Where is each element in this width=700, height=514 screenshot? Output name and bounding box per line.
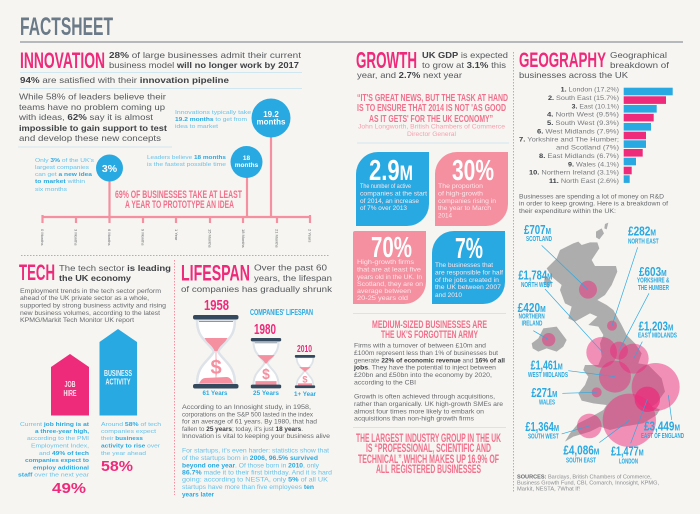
text block: innovation intro bbox=[18, 50, 302, 147]
text block: innovation intro: teams have no problem coming up bbox=[19, 102, 165, 112]
callout: quote: John Longworth, British Chambers of Commerce bbox=[358, 124, 506, 130]
text: 3% note: can get a new idea bbox=[35, 172, 93, 178]
stat card: 2.9M: of 7% over 2013 bbox=[360, 206, 408, 212]
text: geography intro bbox=[519, 50, 670, 80]
chart: job hire arrow bbox=[51, 354, 89, 416]
timeline chart: 6 Months bbox=[107, 229, 112, 245]
chart: region labels: 7. Yorkshire and The Humber; bbox=[519, 137, 619, 144]
map labels: NORTH EAST bbox=[628, 238, 659, 245]
heading: tech: TECH bbox=[19, 260, 55, 285]
stat card: 7%: of the jobs created in bbox=[435, 278, 499, 284]
text: lifespan paragraph: corporations on the S&P 500 lasted in the index bbox=[182, 412, 313, 418]
text: growth intro: to grow at 3.1% this bbox=[422, 60, 506, 70]
callout: prototype headline bbox=[115, 189, 242, 211]
text: forgotten army paragraph: jobs . They have the potential to inject between bbox=[353, 366, 496, 372]
text: tech intro: the UK economy bbox=[59, 274, 132, 283]
text: growth intro: year, and 2.7% next year bbox=[357, 70, 462, 80]
text: geography intro: breakdown of bbox=[610, 60, 670, 70]
callout: prototype headline: A YEAR TO PROTOTYPE AN IDEA bbox=[125, 199, 234, 211]
icon: hourglass 1980: $ bbox=[262, 366, 270, 382]
map labels: £282M bbox=[628, 223, 656, 238]
chart: companies' lifespan hourglasses: 1958 bbox=[204, 297, 229, 314]
map outline bbox=[532, 223, 665, 442]
timeline chart: 21 Months bbox=[274, 229, 280, 248]
text: job hire note: a three-year high, bbox=[35, 429, 89, 435]
icon: hourglass 1958: $ bbox=[210, 357, 222, 379]
map labels: NORTH WEST bbox=[521, 282, 553, 289]
stat card: 30%: companies rising in bbox=[438, 199, 496, 205]
stat card: 7%: and 2010 bbox=[435, 293, 463, 299]
callout: quote bbox=[357, 92, 508, 138]
chart: companies' lifespan hourglasses bbox=[193, 297, 317, 398]
stat card: 30%: The proportion bbox=[438, 184, 483, 190]
text: lifespan intro bbox=[181, 263, 333, 294]
text: forgotten army paragraph: acquisitions than non-high growth firms bbox=[354, 416, 474, 422]
heading: forgotten army: THE UK'S FORGOTTEN ARMY bbox=[381, 329, 478, 341]
chart: region bars bbox=[624, 88, 673, 183]
chart: companies' lifespan hourglasses: 25 Years bbox=[253, 391, 280, 397]
text: forgotten army paragraph: Growth is often achieved through acquisitions, bbox=[354, 395, 495, 401]
text block: innovation intro: with ideas, 62% say it is almost bbox=[18, 112, 154, 122]
callout: prototype headline: 69% OF BUSINESSES TAKE AT LEAST bbox=[115, 189, 242, 201]
text: lifespan paragraph: fallen to 25 years ; today, it's just 18 years . bbox=[182, 427, 303, 433]
text: business activity note: the year ahead bbox=[101, 451, 146, 457]
text: job hire note: according to the PMI bbox=[27, 436, 89, 442]
text: tech paragraph: new business volumes, according to the latest bbox=[20, 311, 160, 317]
text: 18 months note bbox=[147, 155, 226, 168]
text: forgotten army paragraph bbox=[353, 344, 505, 422]
text: startups paragraph: startups have more than five employees ten bbox=[182, 485, 314, 491]
timeline chart: 0 Months bbox=[40, 229, 45, 245]
map labels: £3,449M bbox=[644, 419, 680, 434]
stat card: 2.9M: 2.9M bbox=[369, 155, 413, 187]
text: 19.2 months note: 19.2 months to get from bbox=[175, 117, 247, 123]
stat card: 70% bbox=[353, 231, 426, 304]
chart: region labels: 4. North West (9.5%) bbox=[547, 112, 619, 119]
text: tech paragraph: ahead of the UK private sector as a whole, bbox=[20, 296, 149, 302]
stat card: 7%: are responsible for half bbox=[435, 270, 503, 276]
text: 3% note: Only 3% of the UK's bbox=[35, 158, 94, 164]
stat card: 30%: 30% bbox=[452, 155, 494, 187]
text: forgotten army paragraph: almost four times more likely to embark on bbox=[354, 409, 484, 415]
text: lifespan paragraph: According to an Innosight study, in 1958, bbox=[182, 405, 311, 411]
stat card: 30% bbox=[435, 152, 508, 226]
text: tech paragraph: Employment trends in the tech sector perform bbox=[20, 289, 161, 295]
map labels bbox=[518, 222, 684, 466]
text: 18 months note: Leaders believe 18 months bbox=[147, 155, 226, 161]
text: R&D paragraph: their expenditure within the UK: bbox=[519, 209, 616, 215]
callout: 18 months circle: 18 bbox=[243, 155, 250, 162]
stat card: 70%: Scotland, they are on bbox=[357, 282, 423, 288]
map labels: £1,477M bbox=[611, 443, 644, 458]
chart: region labels: 8. East Midlands (6.7%) bbox=[539, 153, 619, 160]
map labels: SCOTLAND bbox=[526, 236, 552, 243]
text: startups paragraph: 86.7% made it to their first birthday. And it is hard bbox=[182, 470, 332, 476]
callout: largest industry group: IS “PROFESSIONAL, SCIENTIFIC AND bbox=[366, 441, 491, 455]
text: geography intro: Geographical bbox=[610, 50, 667, 60]
stat card: 2.9M: companies at the start bbox=[360, 192, 427, 198]
heading: innovation: INNOVATION bbox=[20, 48, 105, 73]
text: lifespan intro: of companies has gradually shrunk bbox=[181, 284, 333, 294]
stat card: 70%: High-growth firms bbox=[357, 260, 414, 266]
text: business activity note: their business bbox=[101, 436, 144, 442]
chart: region labels: 3. East (10.1%) bbox=[572, 103, 619, 110]
panel: innovation bbox=[18, 48, 313, 248]
text block: innovation intro: 28% of large businesses admit their current bbox=[109, 50, 302, 60]
stat card: 7%: 7% bbox=[455, 233, 483, 265]
map bubbles bbox=[542, 281, 680, 447]
text block: innovation intro: impossible to gain support to test bbox=[19, 123, 167, 133]
text: startups paragraph: years later bbox=[182, 492, 215, 498]
callout: quote: IS TO ENSURE THAT 2014 IS NOT 'AS GOOD bbox=[357, 102, 506, 114]
callout: largest industry group: ALL REGISTERED BUSINESSES bbox=[376, 462, 481, 476]
text: R&D paragraph: in order to keep growing. Here is a breakdown of bbox=[519, 202, 668, 208]
chart: companies' lifespan hourglasses: 61 Years bbox=[202, 391, 228, 397]
chart: region labels: and Scotland (7%) bbox=[556, 145, 619, 152]
text: job hire note: employ additional bbox=[33, 466, 89, 472]
map labels: SOUTH EAST bbox=[566, 458, 596, 465]
text block: innovation intro: 94% are satisfied with their innovation pipeline bbox=[20, 75, 229, 85]
text: forgotten army paragraph: Firms with a turnover of between £10m and bbox=[354, 344, 486, 350]
text: sources: Business Growth Fund, CBI, Comarch, Innosight, KPMG, bbox=[517, 481, 659, 487]
callout: 19.2 months circle: 19.2 bbox=[263, 110, 279, 119]
callout: quote: “IT'S GREAT NEWS, BUT THE TASK AT HAND bbox=[357, 92, 508, 104]
timeline chart bbox=[35, 98, 312, 248]
text: startups paragraph: of the startups born in 2006, 96.5% survived bbox=[182, 456, 318, 462]
text: job hire note bbox=[18, 422, 89, 478]
text: business activity note: activity to rise over bbox=[101, 444, 160, 450]
text: 3% note: largest companies bbox=[35, 165, 89, 171]
icon: hourglass 2010: $ bbox=[302, 374, 308, 384]
callout: largest industry group: THE LARGEST INDUSTRY GROUP IN THE UK bbox=[356, 431, 501, 445]
text: 18 months note: is the fastest possible time bbox=[147, 162, 226, 168]
map labels: £4,086M bbox=[563, 442, 599, 457]
callout: quote: AS IT GETS' FOR THE UK ECONOMY” bbox=[369, 113, 493, 125]
heading: geography: GEOGRAPHY bbox=[519, 49, 606, 72]
text: forgotten army paragraph: generate 22% of economic revenue and 16% of all bbox=[354, 358, 505, 364]
text: business activity note: companies expect bbox=[101, 429, 156, 435]
map: UK regional R&D spend bbox=[518, 222, 684, 466]
stat card: 30%: of high-growth bbox=[438, 192, 483, 198]
text: job hire note: staff over the next year bbox=[18, 472, 89, 478]
map labels: £603M bbox=[639, 264, 667, 279]
map labels: IRELAND bbox=[522, 321, 542, 328]
stat card: 2.9M: of 2014, an increase bbox=[360, 199, 420, 205]
timeline chart: 15 Months bbox=[208, 229, 212, 248]
map labels: THE HUMBER bbox=[638, 285, 669, 292]
map labels: £1,461M bbox=[531, 358, 563, 373]
chart: region labels: 2. South East (15.7%) bbox=[548, 95, 619, 102]
text: growth intro bbox=[357, 50, 508, 80]
text: 3% note: six months bbox=[35, 187, 67, 193]
chart: region labels: 6. West Midlands (7.9%) bbox=[537, 128, 619, 135]
text: tech paragraph: KPMG/Markit Tech Monitor UK report bbox=[20, 318, 134, 324]
stat card: 70%: 20-25 years old bbox=[357, 296, 408, 302]
text: forgotten army paragraph: rather than organically. UK high-growth SMEs are bbox=[354, 402, 504, 408]
text: sources bbox=[517, 475, 659, 493]
map labels: NORTHERN bbox=[519, 314, 545, 321]
text block: innovation intro: business model will no longer work by 2017 bbox=[109, 60, 299, 70]
text: job hire note: Employment Index, bbox=[31, 444, 89, 450]
text: forgotten army paragraph: £100m represent less than 1% of businesses but bbox=[354, 351, 498, 357]
timeline chart: 18 Months bbox=[241, 229, 246, 248]
stat card: 70%: average between bbox=[357, 289, 411, 295]
text: job hire note: Current job hiring is at bbox=[20, 422, 89, 428]
map labels: WALES bbox=[539, 399, 555, 406]
text: lifespan paragraph: for an average of 61 years. By 1980, that had bbox=[182, 420, 317, 426]
chart: companies' lifespan hourglasses: 1+ Year bbox=[294, 392, 317, 398]
text: startups paragraph: beyond one year . Of those born in 2010 , only bbox=[182, 463, 319, 469]
text: tech intro: The tech sector is leading bbox=[59, 264, 171, 273]
timeline chart: 3 Months bbox=[74, 229, 78, 245]
text: growth intro: UK GDP is expected bbox=[422, 50, 508, 60]
panel: lifespan bbox=[181, 261, 333, 498]
callout: 3% circle: 3% bbox=[102, 163, 118, 175]
stat card: 30%: 2014 bbox=[438, 214, 453, 220]
heading: forgotten army bbox=[372, 319, 487, 341]
text: lifespan paragraph bbox=[182, 405, 331, 440]
text: 3% note bbox=[35, 158, 94, 193]
text: forgotten army paragraph: according to the CBI bbox=[354, 380, 416, 386]
stat card: 2.9M: The number of active bbox=[360, 184, 412, 190]
text: tech paragraph: supported by strong business activity and rising bbox=[20, 304, 166, 310]
chart: business activity arrow: BUSINESS bbox=[104, 369, 132, 378]
chart: region labels: 9. Wales (4.1%) bbox=[568, 161, 619, 168]
text: lifespan intro: Over the past 60 bbox=[254, 263, 327, 273]
stat: 58%: 58% bbox=[101, 458, 133, 475]
map labels: EAST MIDLANDS bbox=[638, 333, 677, 340]
stat card: 7% bbox=[432, 231, 505, 304]
text: job hire note: companies expect to bbox=[25, 458, 89, 464]
text block: innovation intro: While 58% of leaders believe their bbox=[19, 92, 166, 102]
text: tech intro bbox=[59, 264, 171, 283]
callout: quote: Director General bbox=[407, 132, 456, 138]
map labels: £1,364M bbox=[525, 419, 559, 434]
text: startups paragraph: going: according to NESTA, only 5% of all UK bbox=[182, 478, 328, 484]
text: 3% note: to market within bbox=[35, 179, 85, 185]
callout: largest industry group bbox=[356, 431, 501, 476]
chart: business activity arrow bbox=[100, 329, 137, 416]
heading: forgotten army: MEDIUM-SIZED BUSINESSES ARE bbox=[372, 319, 487, 331]
map labels: £1,784M bbox=[518, 267, 552, 282]
chart: companies' lifespan hourglasses: 1980 bbox=[254, 321, 276, 338]
chart: region labels: 11. North East (2.6%) bbox=[549, 178, 619, 185]
heading: growth: GROWTH bbox=[356, 47, 417, 73]
text: job hire note: and 49% of tech bbox=[39, 451, 89, 457]
text: forgotten army paragraph: £20bn and £50bn into the economy by 2020, bbox=[354, 373, 492, 379]
text: startups paragraph bbox=[182, 449, 332, 498]
callout: 18 months circle bbox=[230, 146, 262, 178]
stat: 49%: 49% bbox=[52, 480, 86, 497]
map labels: £1,203M bbox=[639, 318, 673, 333]
timeline chart: 1 Year bbox=[174, 229, 179, 241]
text: R&D paragraph bbox=[519, 194, 668, 215]
callout: 19.2 months circle: months bbox=[257, 118, 286, 126]
chart: region labels: 10. Northern Ireland (3.1%) bbox=[529, 170, 619, 177]
chart: business activity arrow: ACTIVITY bbox=[106, 378, 131, 386]
text: 19.2 months note: Innovations typically take bbox=[175, 110, 251, 116]
text: sources: Markit, NESTA, 7What If! bbox=[517, 487, 580, 493]
map labels: £420M bbox=[518, 300, 546, 315]
text block: innovation intro: and develop these new concepts bbox=[19, 133, 161, 143]
stat card: 70%: years old in the UK. In bbox=[357, 275, 422, 281]
heading: lifespan: LIFESPAN bbox=[181, 261, 250, 286]
stat card: 30%: the year to March bbox=[438, 206, 491, 212]
callout: 18 months circle: months bbox=[235, 162, 259, 169]
chart: job hire arrow: JOB bbox=[64, 380, 76, 389]
chart: region labels: 1. London (17.2%) bbox=[561, 87, 619, 94]
text: 19.2 months note: idea to market bbox=[175, 124, 219, 130]
map labels: SOUTH WEST bbox=[528, 433, 559, 440]
callout: 3% circle bbox=[96, 154, 123, 182]
chart: companies' lifespan hourglasses: COMPANIES' LIFESPAN bbox=[250, 307, 313, 317]
text: business activity note bbox=[101, 422, 161, 457]
text: lifespan intro: years, the lifespan bbox=[254, 273, 332, 283]
map labels: £707M bbox=[524, 222, 551, 237]
panel: geography bbox=[517, 49, 684, 493]
text: business activity note: Around 58% of tech bbox=[101, 422, 161, 428]
map leader lines bbox=[533, 245, 672, 443]
title: FACTSHEET bbox=[20, 13, 113, 41]
callout: largest industry group: TECHNICAL”,WHICH MAKES UP 16.9% OF bbox=[358, 452, 499, 466]
chart: job hire arrow: HIRE bbox=[64, 389, 77, 398]
text: geography intro: businesses across the UK bbox=[519, 70, 628, 80]
chart: companies' lifespan hourglasses: 2010 bbox=[297, 344, 312, 355]
stat card: 70%: that are at least five bbox=[357, 268, 422, 274]
stat card: 7%: the UK between 2007 bbox=[435, 285, 502, 291]
map labels: WEST MIDLANDS bbox=[528, 372, 568, 379]
text: lifespan paragraph: Innovation is vital to keeping your business alive bbox=[182, 434, 331, 440]
timeline chart: 2 Years bbox=[308, 229, 312, 242]
panel: growth bbox=[353, 47, 509, 476]
panel: tech bbox=[18, 260, 171, 497]
stat card: 7%: The businesses that bbox=[435, 263, 493, 269]
callout: 19.2 months circle bbox=[252, 98, 290, 138]
timeline chart: 9 Months bbox=[140, 229, 146, 245]
text: startups paragraph: For startups, it's even harder: statistics show that bbox=[182, 449, 329, 455]
stat card: 70%: 70% bbox=[371, 232, 412, 264]
text: sources: SOURCES: Barclays, British Chambers of Commerce, bbox=[517, 475, 652, 481]
stat card: 2.9M bbox=[356, 152, 429, 226]
map labels: £271M bbox=[531, 385, 557, 400]
text: R&D paragraph: Businesses are spending a lot of money on R&D bbox=[519, 194, 665, 200]
map labels: YORKSHIRE & bbox=[637, 278, 669, 285]
text: tech paragraph bbox=[20, 289, 166, 324]
text: 19.2 months note bbox=[175, 110, 251, 130]
chart: region labels: 5. South West (9.3%) bbox=[547, 120, 619, 127]
map labels: LONDON bbox=[619, 459, 638, 466]
chart: region labels bbox=[519, 87, 619, 185]
